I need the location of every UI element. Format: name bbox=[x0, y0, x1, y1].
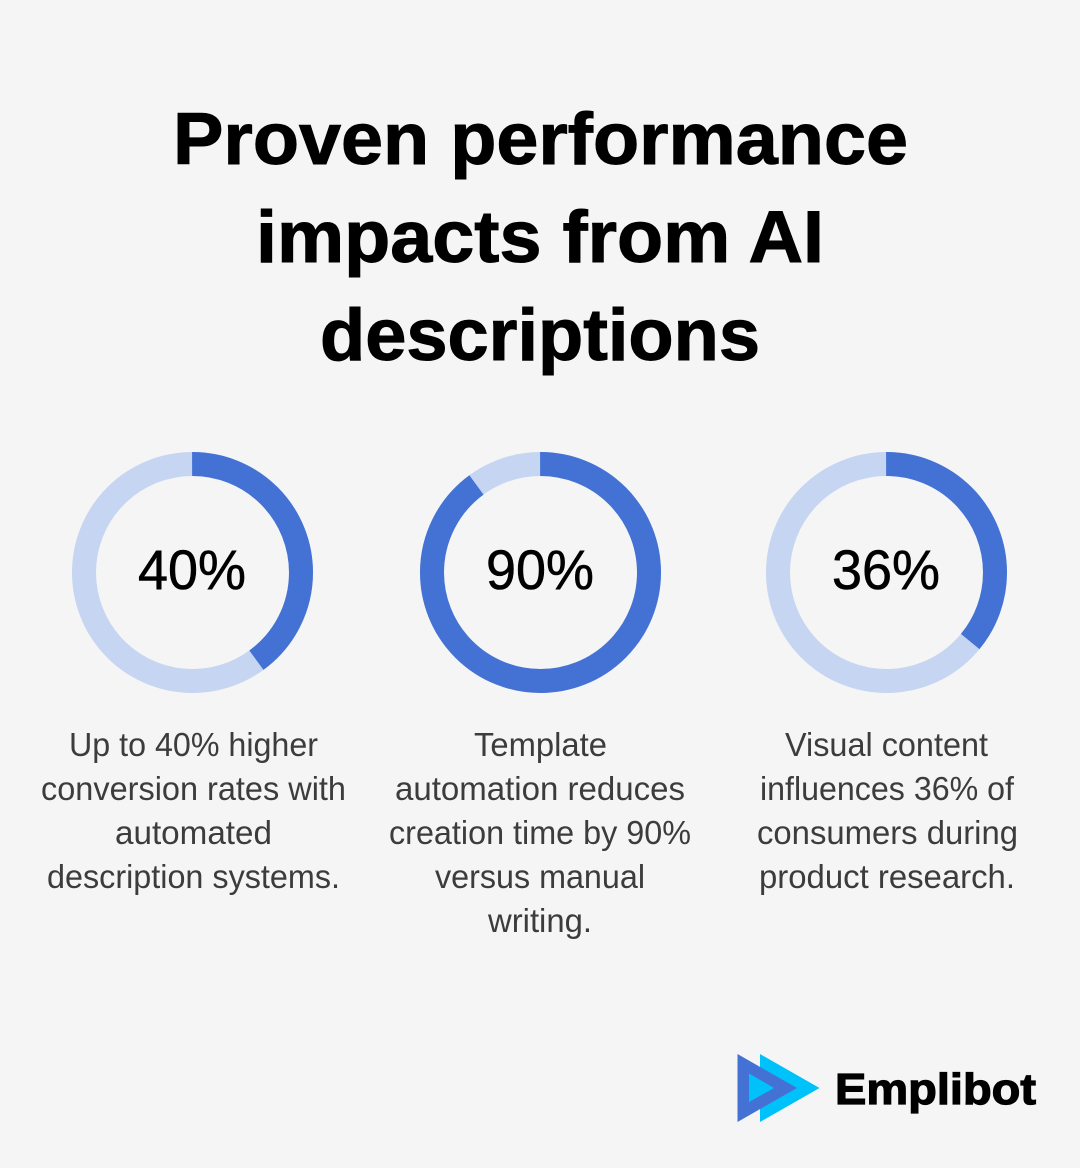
description: 90%: versus manual bbox=[435, 858, 645, 895]
description: 90% bbox=[389, 726, 691, 939]
value: 40%: 40% bbox=[138, 538, 246, 601]
description: 40%: conversion rates with bbox=[41, 770, 346, 807]
panel: 90% stat bbox=[389, 464, 691, 939]
panel: 40% stat bbox=[41, 464, 346, 895]
title: impacts from AI bbox=[256, 197, 824, 278]
title: descriptions bbox=[320, 295, 760, 376]
description: 36%: influences 36% of bbox=[760, 770, 1015, 807]
description: 90%: writing. bbox=[487, 902, 592, 939]
value: 90%: 90% bbox=[486, 538, 594, 601]
panel: 36% stat bbox=[757, 464, 1018, 895]
donut chart: 90% bbox=[432, 464, 649, 681]
donut chart: 40% bbox=[84, 464, 301, 681]
title: Proven performance bbox=[173, 99, 908, 180]
donut chart: 36% bbox=[778, 464, 995, 681]
description: 40% bbox=[41, 726, 346, 895]
title bbox=[173, 99, 908, 376]
value: 36%: 36% bbox=[832, 538, 940, 601]
description: 36% bbox=[757, 726, 1018, 895]
description: 40%: automated bbox=[115, 814, 272, 851]
description: 36%: consumers during bbox=[757, 814, 1018, 851]
logo: Emplibot bbox=[738, 1054, 1036, 1122]
description: 40%: Up to 40% higher bbox=[69, 726, 318, 763]
description: 90%: Template bbox=[474, 726, 607, 763]
description: 40%: description systems. bbox=[47, 858, 340, 895]
description: 90%: creation time by 90% bbox=[389, 814, 691, 851]
description: 36%: product research. bbox=[759, 858, 1015, 895]
wordmark: Emplibot bbox=[835, 1065, 1036, 1114]
description: 36%: Visual content bbox=[785, 726, 988, 763]
icon: play triangles bbox=[738, 1054, 820, 1122]
description: 90%: automation reduces bbox=[395, 770, 685, 807]
